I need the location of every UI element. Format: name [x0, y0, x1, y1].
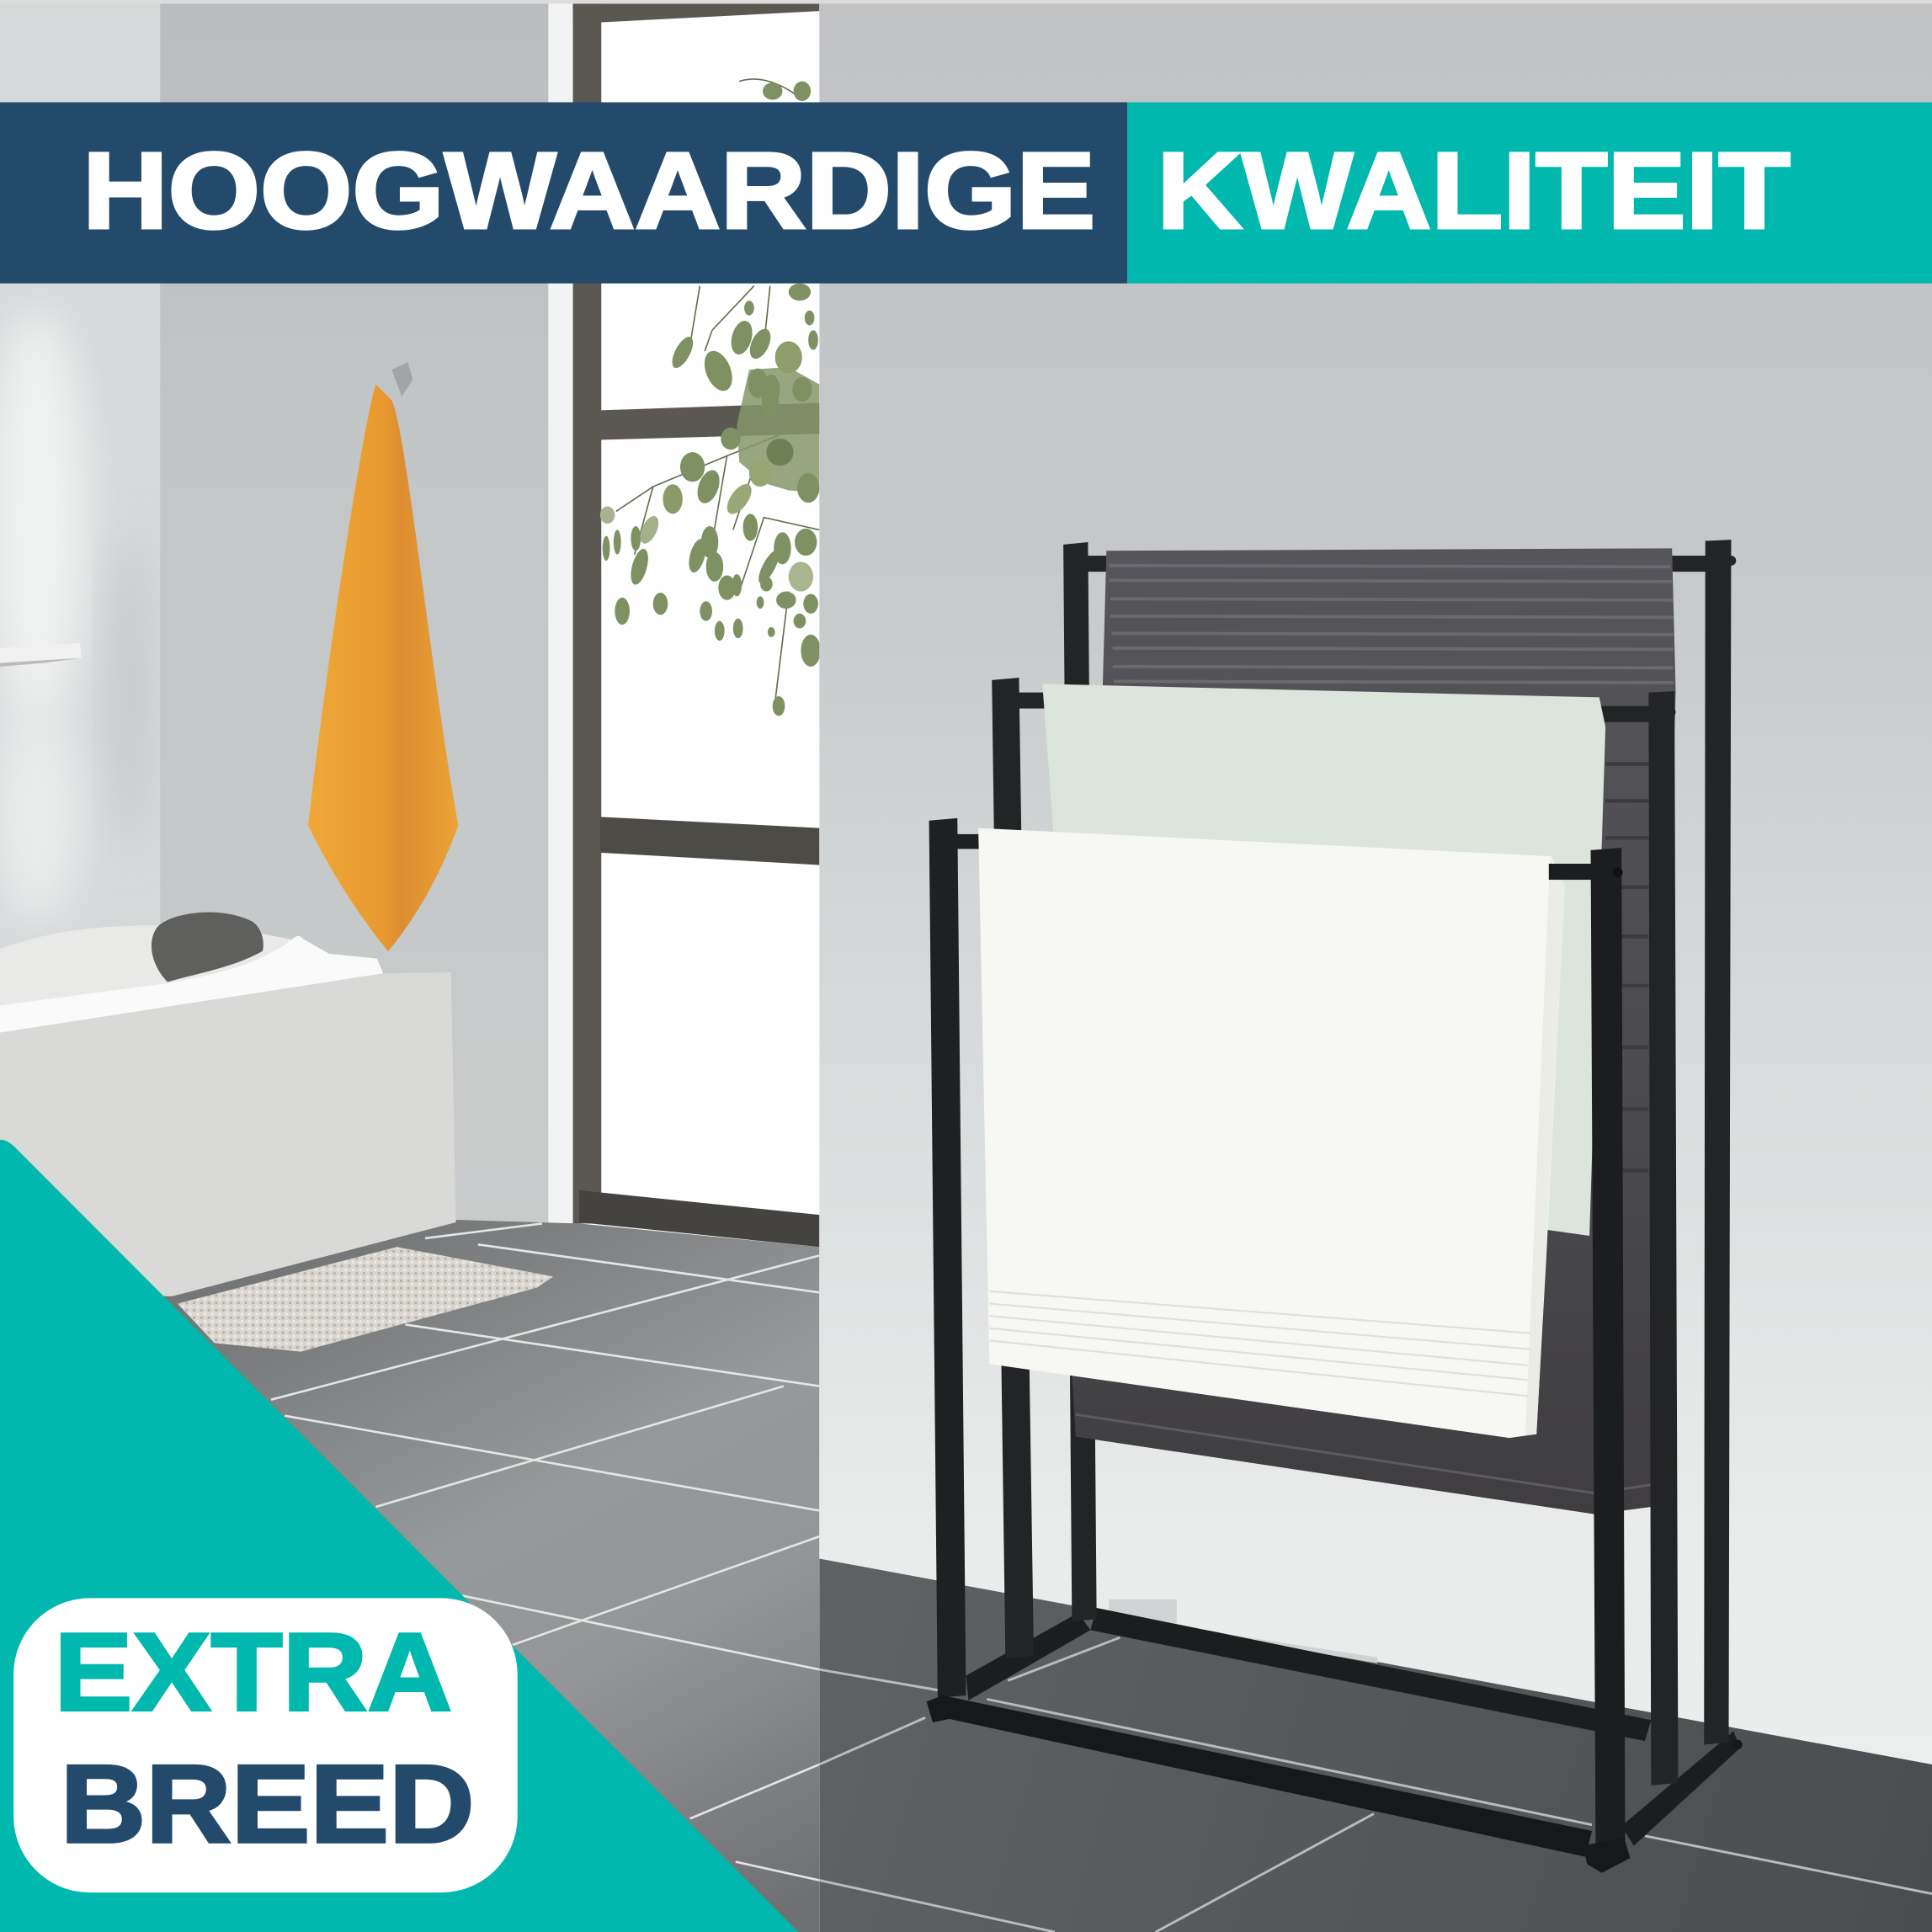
floor grout lines right — [819, 1637, 1932, 1932]
towel rack and towels — [927, 540, 1743, 1873]
tree branches and leaves — [600, 79, 821, 716]
tub inner basin — [0, 925, 291, 1005]
tub side panel — [0, 972, 456, 1296]
rack base: back and side bars — [966, 1608, 1740, 1846]
wall shelf — [0, 643, 82, 667]
front right post and rail — [1549, 848, 1626, 1850]
background: right floor — [819, 1559, 1932, 1932]
bath mat — [178, 1247, 553, 1352]
dark grey striped towel — [1072, 548, 1676, 1514]
title word: kwaliteit: KWALITEIT — [1157, 130, 1791, 252]
badge word: extra: EXTRA — [54, 1610, 452, 1734]
white towel — [978, 828, 1565, 1438]
badge word: breed: BREED — [61, 1742, 475, 1865]
middle rack frame — [992, 678, 1678, 1786]
background: right wall — [819, 0, 1932, 1786]
left side wall with light reflections — [0, 0, 160, 986]
floor tiles — [163, 1220, 820, 1932]
front base bar and feet — [927, 1695, 1743, 1873]
room back wall — [154, 0, 555, 1244]
title word: hoogwaardige: HOOGWAARDIGE — [82, 130, 1095, 252]
banner navy segment — [0, 102, 1127, 284]
back rack frame — [1063, 540, 1736, 1745]
bathroom scene — [0, 0, 821, 1932]
window glass — [819, 12, 820, 508]
bottom-left teal triangle — [0, 1140, 798, 1932]
window frame — [573, 3, 819, 1247]
right wall faint reflection — [1109, 1599, 1377, 1663]
orange towel on hook — [308, 362, 458, 951]
dense leaf cluster — [737, 367, 819, 492]
badge: extra breed — [13, 1598, 518, 1892]
headrest — [152, 913, 263, 982]
top light strip — [0, 0, 1932, 3]
tub rim — [0, 936, 383, 1033]
white column — [548, 0, 576, 1232]
front left post and rail — [929, 818, 982, 1698]
bath tub — [0, 913, 456, 1296]
mint green towel — [1042, 684, 1605, 1236]
title banner — [0, 102, 1932, 284]
banner teal segment — [1127, 102, 1932, 284]
